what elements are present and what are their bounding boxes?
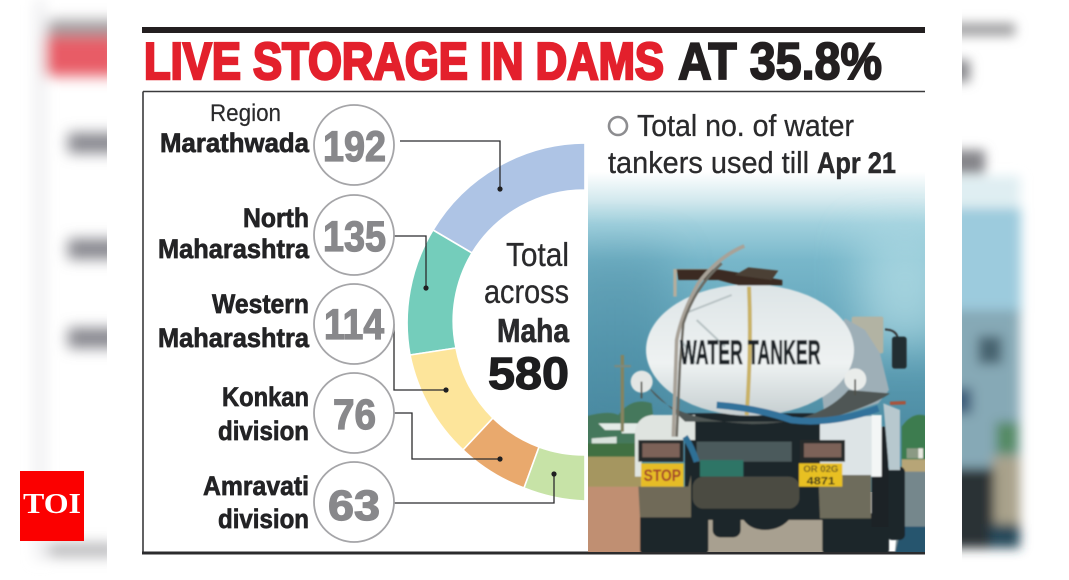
truck body	[635, 403, 900, 520]
row: Western Maharashtra	[158, 284, 394, 364]
title: LIVE STORAGE IN DAMS	[144, 33, 664, 91]
legend date: Apr 21	[817, 147, 896, 180]
value: 114	[324, 301, 384, 349]
segment: Marathwada	[433, 143, 585, 253]
STOP plate: STOP	[644, 466, 681, 485]
title: AT 35.8%	[678, 33, 882, 91]
label: division	[218, 504, 309, 534]
value circle	[314, 284, 394, 364]
STOP plate	[641, 463, 684, 487]
segment: Western Maharashtra	[410, 348, 493, 450]
blue hose	[717, 405, 878, 421]
tank lettering: WATER TANKER	[680, 334, 821, 372]
blurred right backdrop	[950, 23, 1021, 548]
tank and fittings	[631, 284, 890, 424]
legend marker	[609, 117, 627, 135]
white centre panel	[107, 0, 962, 580]
label: Western	[212, 289, 309, 319]
top frame line	[143, 90, 925, 92]
region label header: Region	[210, 100, 281, 127]
donut centre total	[484, 236, 570, 399]
side hose	[685, 437, 697, 462]
value: 76	[333, 391, 376, 439]
leader dots	[423, 186, 557, 477]
row: Konkan division	[218, 373, 394, 453]
donut chart	[407, 143, 585, 501]
label: Konkan	[222, 382, 309, 412]
total value: 580	[488, 348, 569, 399]
TOI logo	[20, 471, 84, 541]
row: North Maharashtra	[158, 195, 394, 275]
panel: photo of water tanker	[588, 177, 925, 552]
value circle	[314, 462, 394, 542]
TOI logo: TOI	[23, 489, 81, 520]
value: 63	[328, 482, 380, 530]
label: Maharashtra	[158, 323, 310, 353]
total line three: Maha	[497, 312, 570, 349]
roadside scenery	[585, 355, 932, 553]
panel frame	[142, 92, 925, 553]
roof rack and pipes	[673, 246, 782, 437]
value: 135	[323, 213, 386, 261]
value circle	[314, 195, 394, 275]
legend line two: tankers used till	[608, 145, 809, 180]
total line two: across	[484, 273, 569, 310]
leader lines	[394, 141, 554, 503]
number plate: 4871	[807, 475, 835, 487]
tanker scene	[585, 246, 932, 554]
row: Amravati division	[203, 462, 394, 542]
row: Marathwada	[160, 105, 394, 185]
label: Marathwada	[160, 128, 310, 158]
legend text: total tankers	[608, 108, 896, 180]
value: 192	[323, 123, 386, 171]
total line one: Total	[506, 236, 569, 273]
segment: North Maharashtra	[407, 230, 472, 355]
wheels	[640, 427, 905, 554]
legend line one: Total no. of water	[637, 108, 854, 143]
number plate: OR 02G	[803, 464, 838, 474]
value circle	[314, 105, 394, 185]
sky	[588, 177, 925, 492]
label: Amravati	[203, 471, 309, 501]
blurred left backdrop	[33, 8, 107, 564]
segment: Konkan	[463, 418, 539, 488]
label: division	[218, 416, 309, 446]
segment: Amravati	[524, 447, 585, 501]
mudflaps and spare tyre	[638, 475, 871, 518]
mirror	[885, 329, 907, 403]
value circle	[314, 373, 394, 453]
label: Maharashtra	[158, 234, 310, 264]
label: North	[243, 203, 309, 233]
number plate	[799, 463, 842, 487]
top rule	[142, 27, 925, 33]
